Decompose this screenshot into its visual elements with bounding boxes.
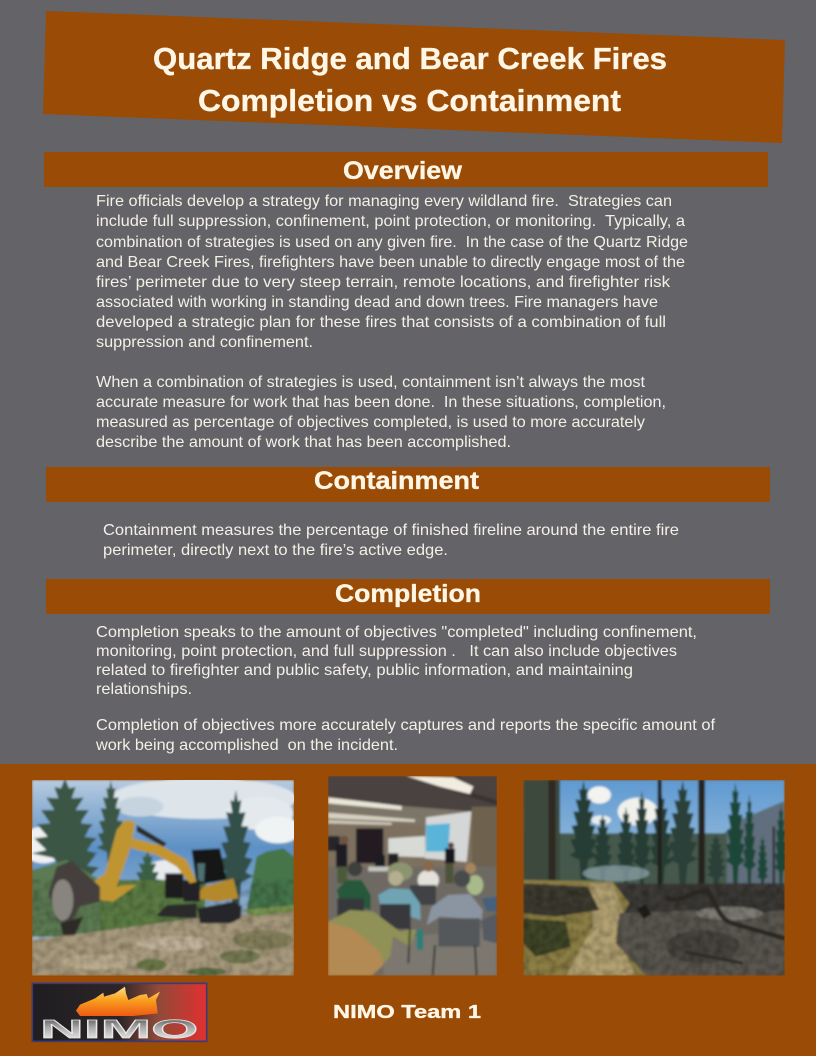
completion text: first paragraph: Completion speaks to the amount of objectives "completed" including confinement, (96, 624, 697, 641)
completion text: second paragraph: Completion of objectives more accurately captures and reports the specific amount of (96, 717, 716, 734)
section: overview (44, 152, 768, 451)
overview text: first paragraph (96, 193, 688, 351)
containment text (103, 522, 679, 559)
overview text: second paragraph: measured as percentage of objectives completed, is used to more accurately (96, 414, 645, 431)
containment heading bar (46, 467, 770, 502)
team label: NIMO Team 1 (333, 1001, 481, 1022)
containment heading bar: Containment (314, 467, 480, 495)
logo wordmark: NIMO (40, 1014, 198, 1044)
overview text: first paragraph: Fire officials develop a strategy for managing every wildland fire. Strategies can (96, 193, 672, 210)
overview text: second paragraph (96, 374, 666, 451)
completion text: first paragraph: relationships. (96, 681, 192, 698)
icon: flame (76, 987, 160, 1016)
title text (153, 41, 667, 118)
title text: Completion vs Containment (198, 83, 621, 118)
excavator body (157, 903, 197, 918)
overview heading bar (44, 152, 768, 187)
overview text: first paragraph: and Bear Creek Fires, firefighters have been unable to directly engage most of the (96, 254, 685, 271)
title text: Quartz Ridge and Bear Creek Fires (153, 41, 667, 76)
completion text: second paragraph: work being accomplished on the incident. (95, 737, 398, 754)
containment text: Containment measures the percentage of finished fireline around the entire fire (103, 522, 679, 539)
overview text: first paragraph: fires’ perimeter due to very steep terrain, remote locations, and firefighter risk (96, 274, 671, 291)
overview text: first paragraph: include full suppression, confinement, point protection, or monitoring. Typically, a (96, 213, 685, 230)
section: completion (46, 579, 770, 754)
completion text: first paragraph: monitoring, point protection, and full suppression . It can also include objectives (96, 643, 677, 660)
containment text: perimeter, directly next to the fire’s active edge. (103, 542, 448, 559)
completion heading bar (46, 579, 770, 614)
overview text: first paragraph: developed a strategic plan for these fires that consists of a combination of full (96, 314, 666, 331)
overview text: second paragraph: accurate measure for work that has been done. In these situations, completion, (96, 394, 666, 411)
completion heading bar: Completion (335, 580, 481, 608)
photo: team briefing in a conference room (328, 776, 497, 976)
overview heading bar: Overview (343, 157, 463, 185)
overview text: second paragraph: When a combination of strategies is used, containment isn’t always the most (96, 374, 646, 391)
overview text: first paragraph: associated with working in standing dead and down trees. Fire managers have (96, 294, 658, 311)
title banner (43, 11, 785, 143)
completion text: first paragraph (96, 624, 697, 698)
overview text: second paragraph: describe the amount of work that has been accomplished. (96, 434, 511, 451)
completion text: first paragraph: related to firefighter and public safety, public information, and maintaining (96, 662, 633, 679)
overview text: first paragraph: combination of strategies is used on any given fire. In the case of the Quartz Ridge (96, 234, 688, 251)
footer band (0, 764, 816, 1056)
section: containment (46, 467, 770, 559)
photo: excavator masticator on a cleared fireline (20, 778, 302, 976)
photo: burned forest with trail (523, 780, 788, 976)
logo: NIMO flame badge (32, 983, 207, 1044)
completion text: second paragraph (95, 717, 716, 754)
overview text: first paragraph: suppression and confinement. (96, 334, 313, 351)
